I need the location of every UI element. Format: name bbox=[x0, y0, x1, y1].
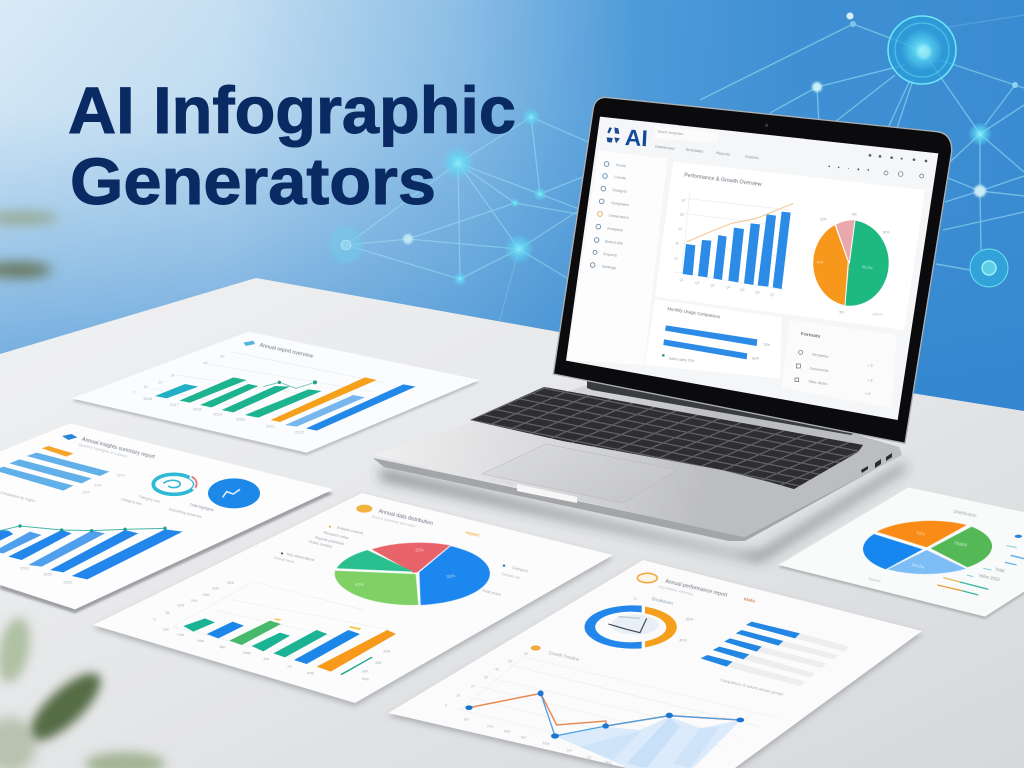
bar chart: Sep bbox=[362, 676, 370, 681]
formats list: + 4 bbox=[865, 392, 870, 396]
chart heading: Performance & Growth Overview bbox=[684, 173, 762, 188]
bar chart: 40K bbox=[212, 585, 219, 590]
title bbox=[68, 73, 516, 218]
heading and donut chart bbox=[584, 573, 756, 649]
pie chart: 32% bbox=[916, 530, 926, 537]
pie chart bbox=[335, 543, 490, 605]
ports bbox=[861, 453, 892, 473]
bar chart: 20K bbox=[191, 598, 198, 603]
document: donut, bars and line chart bbox=[388, 560, 922, 768]
heading: Quarterly highlights at a glance bbox=[78, 442, 128, 458]
screen bbox=[566, 117, 938, 420]
title: AI Infographic bbox=[68, 73, 516, 147]
laptop base bbox=[373, 385, 902, 541]
sidebar panel bbox=[567, 151, 667, 365]
line and area chart: 60 bbox=[524, 652, 528, 656]
pie chart bbox=[863, 521, 992, 574]
document: right pie bbox=[778, 487, 1024, 619]
bar chart on screen: 20 bbox=[674, 256, 678, 260]
pie chart: Digital bbox=[954, 540, 967, 548]
bar chart: 30K bbox=[362, 669, 369, 674]
gridlines and axis labels: 0 bbox=[133, 389, 136, 394]
bezel bbox=[553, 97, 952, 443]
horizontal bars bbox=[701, 622, 849, 697]
legend left bbox=[273, 525, 363, 564]
axis labels: 2020 bbox=[43, 571, 53, 576]
bar chart on screen: Q6 bbox=[755, 290, 760, 294]
sidebar menu: Settings bbox=[602, 264, 616, 270]
laptop shadow bbox=[380, 462, 905, 562]
line and area chart: Apr bbox=[521, 736, 527, 740]
heading: report bbox=[465, 529, 480, 539]
gridlines and axis labels: 10 bbox=[143, 384, 149, 389]
network graphic: right nodes bbox=[700, 12, 1024, 287]
line and area chart: 40 bbox=[495, 668, 499, 672]
bar chart on screen: Q4 bbox=[726, 286, 731, 290]
navigation tabs: Exports bbox=[745, 153, 759, 160]
chart title: Annual report overview bbox=[259, 343, 314, 360]
axis labels bbox=[143, 396, 305, 434]
legend: Total bbox=[995, 567, 1005, 574]
heading: Source summary and notes bbox=[371, 514, 416, 528]
bar chart on screen bbox=[673, 190, 793, 297]
lower bar panel: Monthly Usage Comparison bbox=[667, 306, 721, 319]
bar chart: Mar bbox=[197, 638, 205, 643]
bar chart: 50K bbox=[383, 649, 391, 654]
navigation tabs: Templates bbox=[685, 147, 704, 154]
heading: Annual data distribution bbox=[378, 509, 434, 527]
line and area chart: Jun bbox=[566, 749, 572, 753]
sidebar menu: Brand kits bbox=[605, 238, 623, 245]
sidebar menu: Home bbox=[616, 162, 627, 168]
search box: Search templates bbox=[657, 130, 684, 136]
formats list: + 3 bbox=[867, 364, 873, 368]
bar chart: Aug bbox=[307, 670, 314, 675]
heading and donut chart: stats bbox=[743, 596, 756, 605]
bar chart: 0 bbox=[153, 617, 156, 622]
heading and donut chart: Breakdown bbox=[651, 596, 674, 606]
document: left mixed charts bbox=[0, 423, 333, 613]
bar chart: Jun bbox=[263, 656, 269, 661]
pie chart: Media bbox=[911, 562, 925, 570]
legend text: Comparison by region bbox=[0, 490, 35, 503]
sidebar menu: Create bbox=[614, 174, 627, 181]
formats list: + 2 bbox=[867, 378, 873, 382]
legend left: Research notes bbox=[323, 530, 349, 540]
main chart panel bbox=[655, 162, 925, 330]
bar chart on screen: Q1 bbox=[679, 278, 684, 282]
line and area chart: May bbox=[543, 741, 550, 745]
sidebar menu: Exports bbox=[603, 251, 617, 258]
blurred foliage: lower left bbox=[0, 615, 165, 768]
heading and donut chart: 60% bbox=[686, 618, 694, 622]
pie chart on screen bbox=[813, 212, 889, 316]
legend left: Charts created bbox=[308, 540, 332, 549]
bar chart: Feb bbox=[177, 632, 185, 637]
sidebar menu bbox=[590, 162, 629, 270]
value labels: 18% bbox=[82, 489, 90, 494]
navigation tabs: Reports bbox=[716, 150, 730, 157]
trend line bbox=[0, 524, 167, 532]
value labels: 30% bbox=[117, 473, 125, 478]
trend line bbox=[263, 380, 317, 388]
bars bbox=[155, 377, 416, 431]
horizontal bars: Comparison of values across groups bbox=[720, 677, 784, 697]
line and area chart: Jul bbox=[587, 755, 592, 759]
logo bbox=[607, 124, 648, 151]
formats list: Slide decks bbox=[808, 380, 827, 386]
bar chart: 5K bbox=[165, 610, 171, 615]
legend right: Details list bbox=[501, 571, 521, 580]
hinge bbox=[587, 376, 860, 435]
donut swirl bbox=[153, 474, 197, 494]
bar chart on screen: 30 bbox=[675, 242, 679, 246]
legend text: Supporting detail line bbox=[168, 507, 202, 519]
navigation tabs: Dashboard bbox=[655, 143, 675, 151]
toolbar icons bbox=[828, 154, 927, 178]
network graphic: left nodes bbox=[329, 108, 595, 330]
axis labels: 2016 bbox=[143, 396, 153, 401]
legend text: Category two bbox=[120, 497, 142, 506]
lower bar panel: Active users 72% bbox=[669, 356, 695, 363]
document: top bar chart bbox=[72, 332, 479, 455]
gridlines and axis labels: 50 bbox=[220, 353, 225, 358]
legend right bbox=[481, 564, 528, 597]
gridlines and axis labels bbox=[133, 352, 383, 417]
logo: AI bbox=[624, 124, 648, 151]
bar chart on screen: Q7 bbox=[770, 293, 775, 297]
pie chart on screen: 5% bbox=[839, 310, 844, 314]
pie chart: 40% bbox=[355, 582, 364, 587]
line and area chart: Mar bbox=[504, 730, 511, 734]
value labels: 24% bbox=[94, 483, 102, 488]
axis labels: 2017 bbox=[170, 402, 180, 407]
lower bar panel: 72% bbox=[763, 343, 770, 347]
axis labels: 2018 bbox=[193, 407, 202, 412]
value labels bbox=[82, 473, 125, 494]
bar chart: Apr bbox=[219, 644, 226, 649]
bottom right panel bbox=[782, 320, 897, 408]
heading: Annual insights summary report bbox=[81, 437, 156, 461]
sidebar menu: Generators bbox=[609, 213, 629, 220]
legend text bbox=[0, 490, 214, 519]
pie chart on screen: 45% bbox=[817, 260, 823, 264]
axis labels: 2020 bbox=[236, 417, 246, 422]
bar chart on screen: 60 bbox=[682, 199, 686, 203]
bar chart: Jan bbox=[163, 627, 169, 632]
pie chart: 35% bbox=[446, 573, 456, 579]
line and area chart: 50 bbox=[508, 660, 512, 664]
legend left: Analysis content bbox=[336, 525, 363, 535]
sidebar menu: Designs bbox=[612, 187, 627, 194]
heading and donut chart: Key metrics summary bbox=[658, 584, 693, 596]
axis labels: 2022 bbox=[295, 429, 305, 434]
formats list: Templates bbox=[812, 352, 829, 359]
pie chart on screen: 12% bbox=[820, 218, 827, 222]
heading: Distribution bbox=[953, 509, 977, 519]
legend left: Key observations bbox=[286, 552, 315, 562]
bar chart on screen: Q2 bbox=[695, 281, 700, 285]
pie chart on screen: 30% bbox=[883, 230, 889, 234]
formats list: Formats bbox=[800, 331, 821, 340]
source caption: Source bbox=[868, 576, 882, 584]
legend right: Total share bbox=[481, 588, 502, 597]
gridlines and axis labels: 20 bbox=[158, 379, 163, 384]
bottom left panel bbox=[645, 299, 782, 378]
lower bar panel: 61% bbox=[752, 356, 759, 360]
pie chart: 15% bbox=[415, 548, 424, 553]
line and area chart: 0 bbox=[445, 704, 447, 708]
axis labels: 2021 bbox=[266, 423, 276, 428]
formats list bbox=[795, 331, 873, 396]
line and area chart: 30 bbox=[484, 675, 488, 679]
pie chart on screen: Others bbox=[873, 312, 883, 316]
pie chart on screen: 55.2% bbox=[862, 265, 873, 271]
keyboard bbox=[470, 387, 863, 489]
navigation tabs bbox=[655, 143, 759, 160]
bar chart: Jul bbox=[287, 663, 292, 668]
legend: Value 2022 bbox=[978, 573, 1001, 582]
formats list: Documents bbox=[810, 366, 829, 373]
line and area chart: Jan bbox=[463, 718, 469, 722]
line and area chart: Feb bbox=[487, 724, 494, 728]
bar chart on screen: Q3 bbox=[710, 284, 715, 288]
axis labels: 2019 bbox=[20, 565, 30, 570]
heading and donut chart: 10 bbox=[633, 597, 637, 601]
bar chart: 30K bbox=[203, 592, 210, 597]
line and area chart: Growth Timeline bbox=[548, 650, 580, 662]
heading bbox=[356, 505, 480, 539]
gridlines and axis labels: 30 bbox=[171, 373, 176, 378]
bar chart on screen: 50 bbox=[680, 213, 684, 217]
bar chart on screen: 40 bbox=[678, 227, 682, 231]
axis labels: 2019 bbox=[213, 411, 223, 416]
desk surface bbox=[0, 278, 1024, 768]
bar chart: May bbox=[243, 650, 251, 655]
lower bar panel bbox=[662, 306, 770, 363]
sidebar menu: Templates bbox=[611, 200, 629, 207]
legend left: Overall trend bbox=[273, 556, 294, 564]
bar chart: 10K bbox=[177, 603, 185, 608]
line and area chart: Aug bbox=[605, 760, 612, 764]
axis labels bbox=[20, 565, 73, 584]
laptop bbox=[373, 97, 952, 562]
gridlines and axis labels: 40 bbox=[203, 360, 209, 365]
bar chart: 50K bbox=[227, 580, 235, 585]
title: Generators bbox=[70, 144, 436, 218]
front notch bbox=[517, 484, 577, 503]
bar chart: 40K bbox=[375, 660, 382, 665]
heading and donut chart: Annual performance report bbox=[665, 579, 728, 599]
horizontal bars bbox=[0, 446, 109, 491]
blue bar chart bbox=[0, 529, 183, 579]
line and area chart bbox=[445, 645, 780, 768]
line and area chart: 20 bbox=[471, 684, 475, 688]
line and area chart: 10 bbox=[456, 694, 460, 698]
document: pie and bars bbox=[93, 493, 613, 706]
legend text: Category one bbox=[138, 494, 160, 504]
axis labels: 2021 bbox=[63, 579, 73, 584]
pie chart on screen: 8% bbox=[852, 212, 857, 216]
search box bbox=[653, 127, 718, 143]
legend left: Reports published bbox=[315, 535, 344, 546]
heading and donut chart: 40% bbox=[679, 639, 687, 643]
laptop lid and screen bbox=[553, 97, 952, 443]
blue circle badge bbox=[208, 478, 260, 508]
trackpad bbox=[482, 444, 677, 503]
legend bbox=[937, 535, 1024, 595]
legend text: Data highlights bbox=[190, 502, 214, 512]
bar chart on screen: Q5 bbox=[740, 288, 745, 292]
blurred foliage: upper left bbox=[0, 212, 58, 278]
bar chart bbox=[153, 580, 396, 681]
sidebar menu: Analytics bbox=[607, 225, 623, 232]
legend right: Category bbox=[511, 564, 528, 573]
chart title bbox=[243, 341, 314, 360]
